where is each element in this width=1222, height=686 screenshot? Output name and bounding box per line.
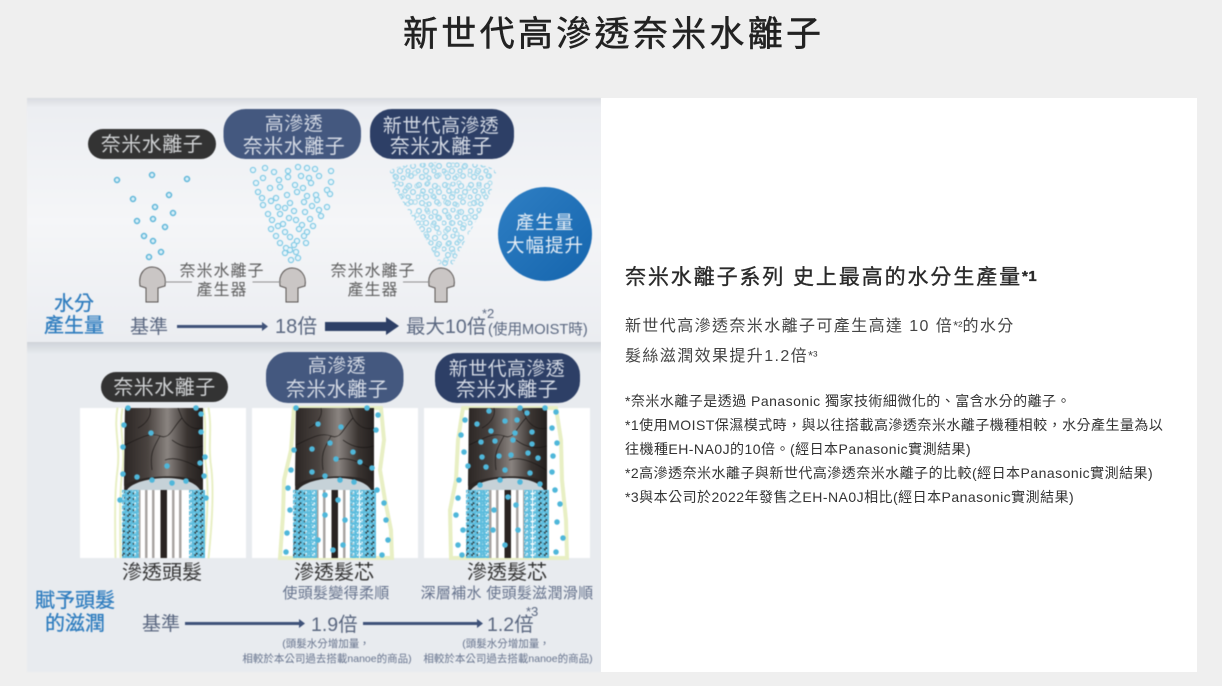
generator label 1: 產生器 bbox=[196, 281, 248, 299]
badge: output greatly increased bbox=[498, 187, 592, 281]
lower pill: new generation bbox=[435, 353, 580, 403]
value: 1.2x: 1.2倍 bbox=[487, 614, 534, 636]
title: 新世代高滲透奈米水離子 bbox=[403, 15, 824, 54]
hair panel: nano ions bbox=[80, 408, 246, 558]
pill: high-penetration nano ions bbox=[224, 109, 361, 159]
pill: new generation nano ions: 新世代高滲透 bbox=[383, 115, 499, 137]
footnotes: *2高滲透奈米水離子與新世代高滲透奈米水離子的比較(經日本Panasonic實測結果) bbox=[625, 465, 1153, 481]
row label: moisture output: 水分 bbox=[54, 292, 94, 315]
pill: new generation nano ions bbox=[370, 109, 514, 159]
hair panel: new generation bbox=[424, 408, 590, 558]
pill: high-penetration nano ions: 奈米水離子 bbox=[243, 135, 345, 158]
lower pill: nano ions: 奈米水離子 bbox=[113, 376, 216, 399]
note: using MOIST: (使用MOIST時) bbox=[488, 321, 588, 338]
lower pill: high-penetration: 高滲透 bbox=[308, 355, 366, 377]
lower pill: new generation: 奈米水離子 bbox=[456, 378, 558, 401]
footnotes bbox=[625, 393, 1163, 505]
badge: output greatly increased: 產生量 bbox=[516, 212, 574, 233]
nozzle: new generation bbox=[403, 268, 454, 302]
pill: nano ions: 奈米水離子 bbox=[101, 133, 203, 156]
generator label 1: 奈米水離子 bbox=[179, 262, 265, 280]
hair panel: high-penetration bbox=[252, 408, 418, 558]
spray: high-penetration bbox=[253, 167, 331, 260]
body text bbox=[625, 317, 1015, 365]
footnote mark 2: *2 bbox=[482, 306, 494, 321]
lower pill: nano ions bbox=[101, 372, 228, 402]
spray: new generation bbox=[389, 162, 496, 266]
caption: penetrates hair: 滲透頭髮 bbox=[122, 561, 202, 584]
caption: penetrates core 2: 滲透髮芯 bbox=[467, 561, 547, 584]
note: compare 1: (頭髮水分增加量， bbox=[282, 637, 370, 650]
nozzle: nano ions bbox=[140, 267, 192, 302]
note: compare 1: 相較於本公司過去搭載nanoe的商品) bbox=[242, 652, 412, 665]
pill: nano ions bbox=[88, 129, 216, 159]
arrow: 1.9x to 1.2x bbox=[363, 619, 483, 628]
body text: 髮絲滋潤效果提升1.2倍*³ bbox=[625, 348, 817, 365]
lower pill: high-penetration bbox=[266, 352, 404, 403]
generator label 2: 奈米水離子 bbox=[330, 262, 416, 280]
sub caption: deep hydration: 深層補水 使頭髮滋潤滑順 bbox=[421, 585, 593, 602]
thick arrow bbox=[325, 317, 399, 335]
value: max 10x: 最大10倍 bbox=[406, 316, 486, 338]
arrow: baseline to 1.9x bbox=[185, 619, 305, 628]
value: 18x: 18倍 bbox=[275, 315, 317, 338]
footnotes: *1使用MOIST保濕模式時，與以往搭載高滲透奈米水離子機種相較，水分產生量為以 bbox=[625, 417, 1163, 433]
upper section background bbox=[27, 98, 601, 344]
panel: infographic image bbox=[26, 98, 601, 665]
spray: nano ions bbox=[117, 175, 187, 257]
baseline value lower: 基準 bbox=[142, 613, 180, 635]
generator label 2: 產生器 bbox=[347, 281, 399, 299]
heading: 奈米水離子系列 史上最高的水分生產量*1 bbox=[625, 266, 1037, 289]
nozzle: high-penetration bbox=[252, 268, 305, 302]
footnotes: 往機種EH-NA0J的10倍。(經日本Panasonic實測結果) bbox=[625, 441, 971, 457]
footnotes: *奈米水離子是透過 Panasonic 獨家技術細微化的、富含水分的離子。 bbox=[625, 393, 1071, 409]
lower pill: new generation: 新世代高滲透 bbox=[449, 358, 565, 380]
pill: high-penetration nano ions: 高滲透 bbox=[265, 113, 323, 135]
lower section background bbox=[27, 344, 601, 672]
row label: moisture output: 產生量 bbox=[44, 314, 104, 337]
pill: new generation nano ions: 奈米水離子 bbox=[390, 135, 492, 158]
panel: description bbox=[601, 98, 1197, 672]
lower pill: high-penetration: 奈米水離子 bbox=[286, 378, 388, 401]
row label: hair moisture: 的滋潤 bbox=[45, 612, 105, 635]
body text: 新世代高滲透奈米水離子可產生高達 10 倍*²的水分 bbox=[625, 318, 1015, 335]
arrow: baseline to 18x bbox=[177, 322, 268, 331]
badge: output greatly increased: 大幅提升 bbox=[506, 235, 584, 256]
caption: penetrates core: 滲透髮芯 bbox=[294, 561, 374, 584]
row label: hair moisture: 賦予頭髮 bbox=[35, 589, 115, 612]
value: 1.9x: 1.9倍 bbox=[311, 614, 358, 636]
baseline value: 基準 bbox=[130, 316, 168, 338]
footnotes: *3與本公司於2022年發售之EH-NA0J相比(經日本Panasonic實測結果) bbox=[625, 489, 1074, 505]
footnote mark 3: *3 bbox=[526, 604, 538, 619]
sub caption: smooth: 使頭髮變得柔順 bbox=[282, 585, 390, 602]
note: compare 2: (頭髮水分增加量， bbox=[462, 637, 550, 650]
note: compare 2: 相較於本公司過去搭載nanoe的商品) bbox=[423, 652, 593, 665]
